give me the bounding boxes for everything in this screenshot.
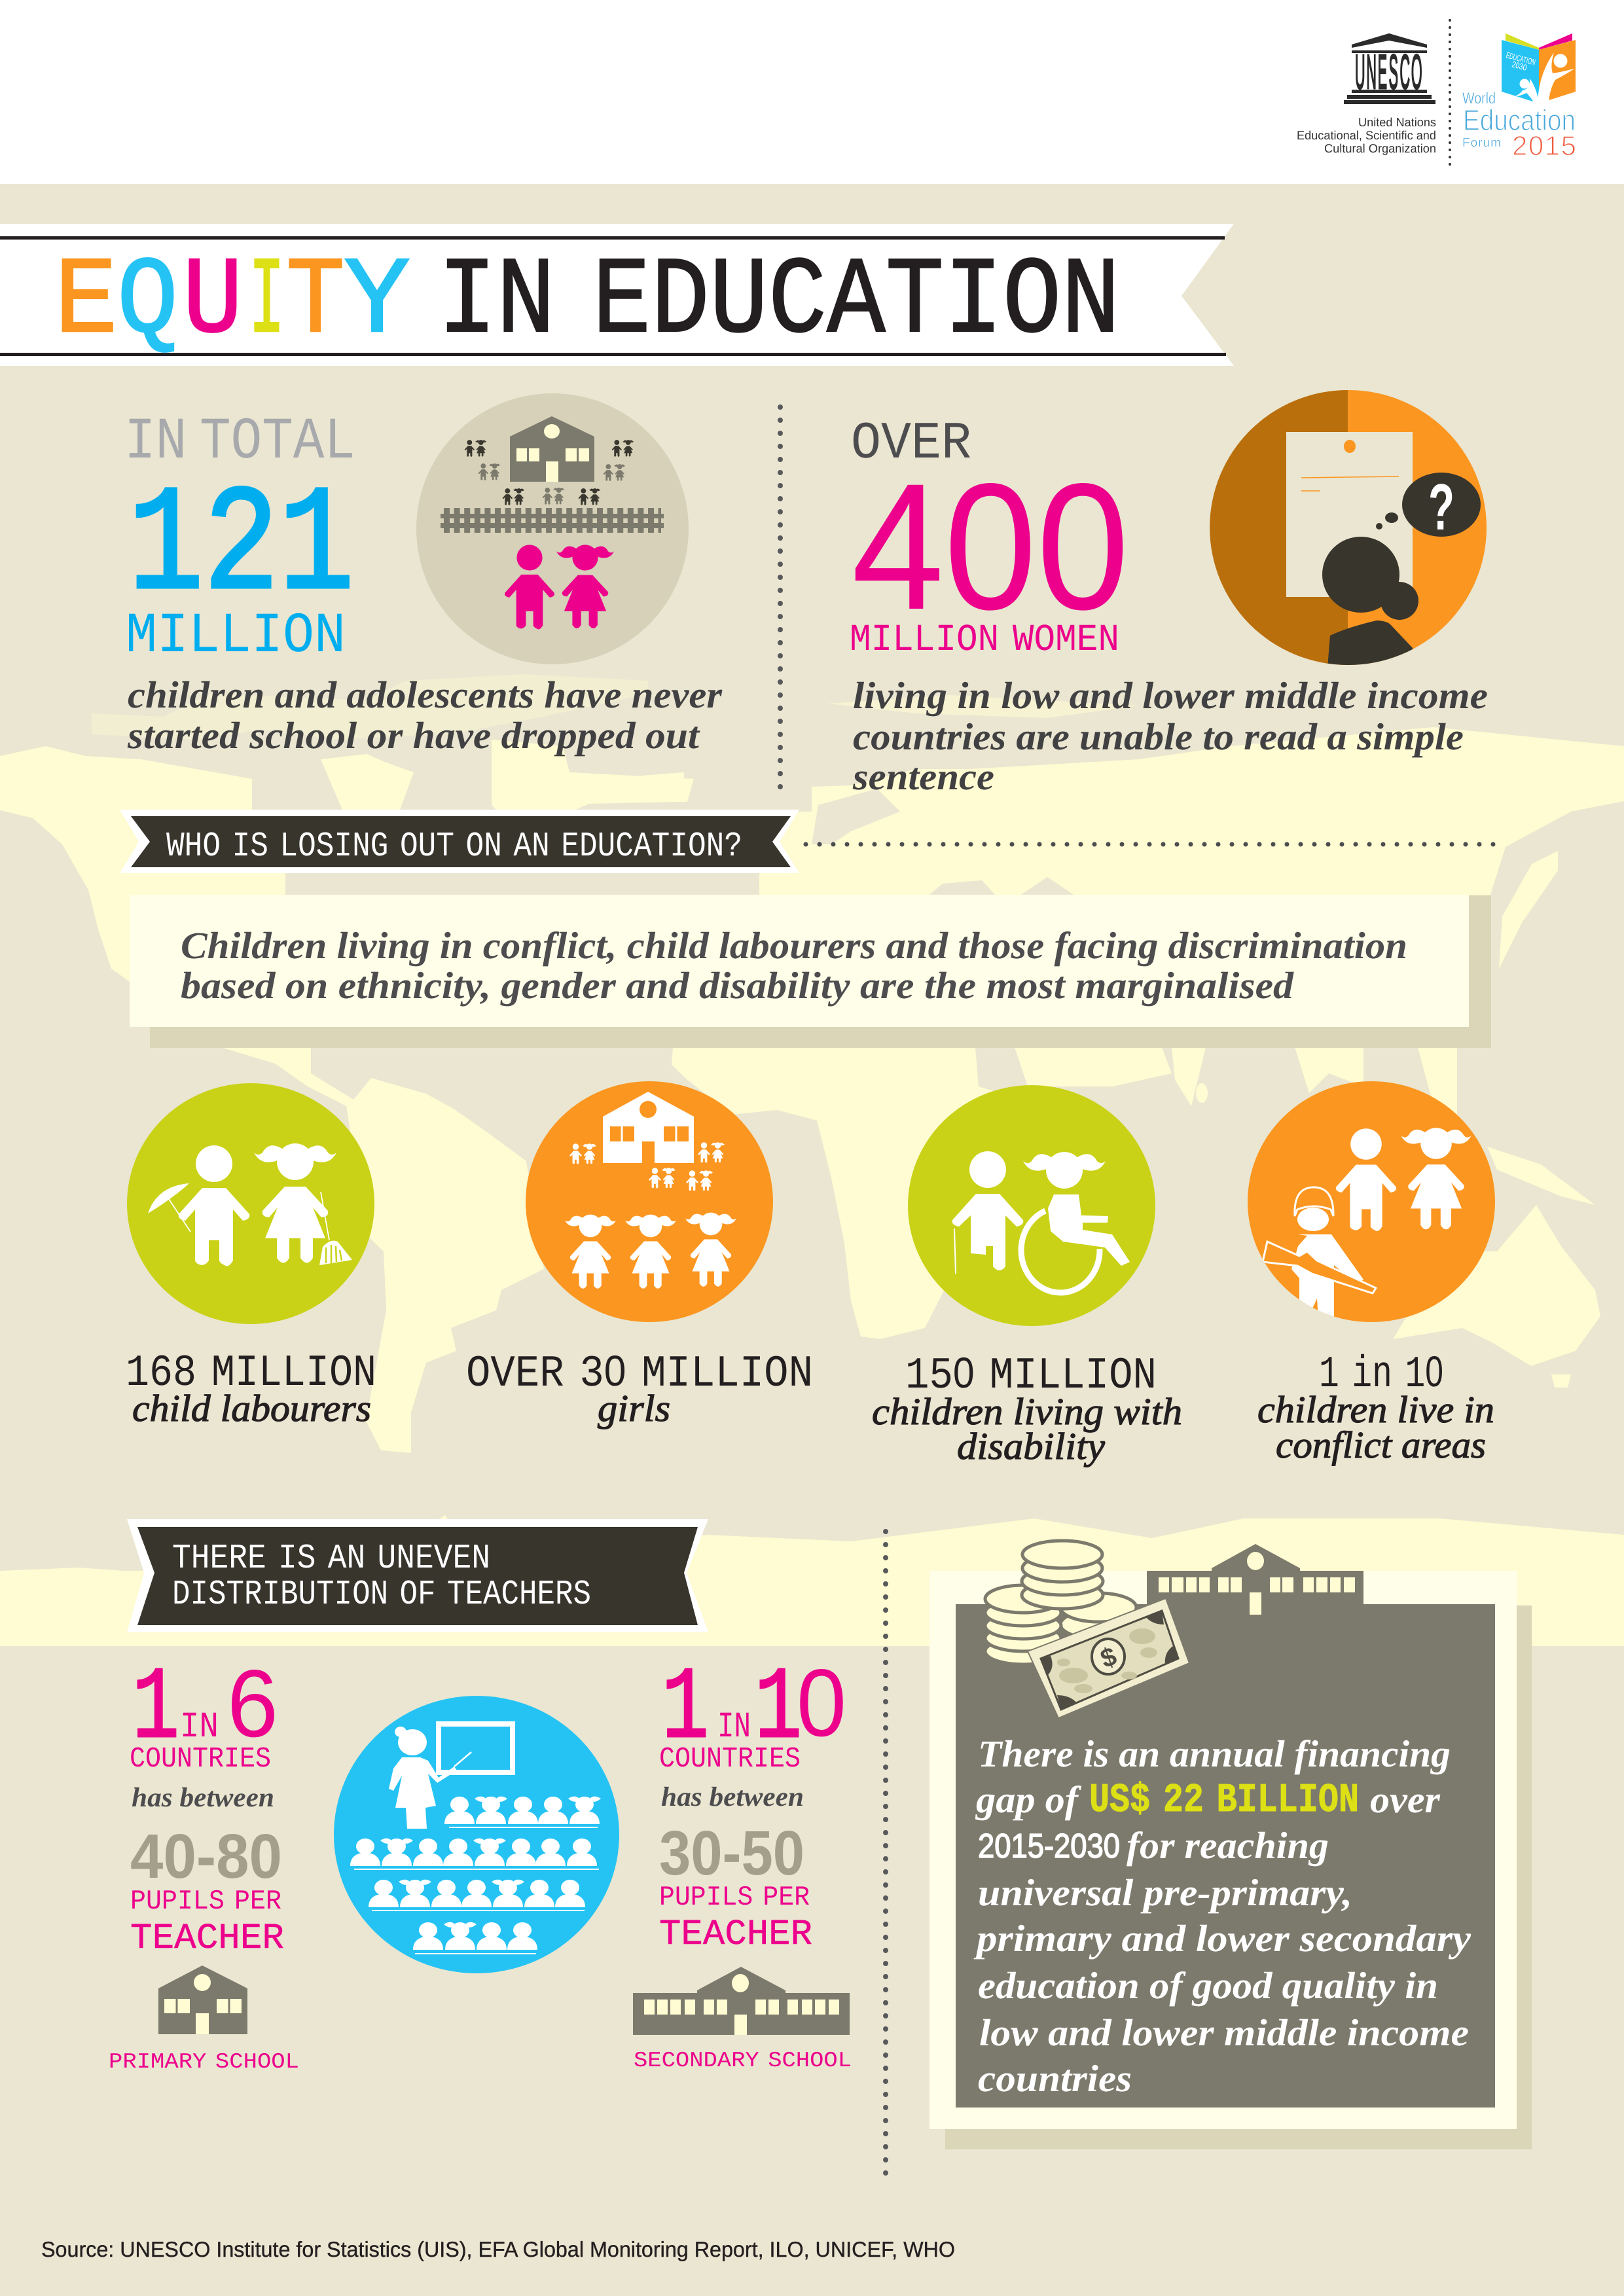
financing text: education of good quality in [978,1964,1438,2007]
description [852,674,1488,798]
banner text: THERE IS AN UNEVEN [172,1539,490,1578]
description: children and adolescents have never [128,673,722,716]
label: over 30 million girls: girls [598,1387,670,1429]
description: started school or have dropped out [127,714,700,757]
label: 150 million children with disability: children living with [872,1390,1182,1433]
title text: I [249,241,285,365]
financing text: universal pre-primary, [978,1871,1352,1914]
description [127,673,722,757]
title text: U [183,241,243,365]
wordmark: World [1462,90,1496,107]
title text: Y [344,241,410,365]
cream frame [929,1571,1517,2129]
financing text: gap of [975,1778,1082,1821]
paper [1286,432,1413,597]
world map background [0,674,1624,1646]
map inland seas [812,789,1074,1080]
title text: E [54,241,118,365]
UNESCO full name: Educational, Scientific and [1297,128,1436,142]
kicker: OVER [851,414,971,474]
number: 400 [852,446,1129,647]
book icon: EDUCATION [1505,50,1537,67]
financing text: 2015-2030 [978,1827,1120,1865]
label: 168 million child labourers: 168 MILLION [126,1348,376,1399]
title text: IN EDUCATION [438,241,1120,365]
icon: woman unable to read [1210,390,1487,668]
icon: secondary school [633,1967,850,2035]
description: sentence [852,755,994,798]
label: 150 million children with disability: 150 MILLION [905,1348,1157,1401]
soldier [1263,1187,1376,1329]
wordmark: Education [1463,103,1576,137]
wordmark: 2015 [1512,130,1576,161]
icon: primary school [158,1965,247,2034]
financing text: low and lower middle income [979,2011,1469,2054]
statistic: primary school ratio [130,1650,284,1959]
label: over 30 million girls: OVER 30 MILLION [466,1346,813,1399]
title text [54,241,1120,365]
fence [441,514,664,528]
boy and girl [505,545,614,630]
label: over 30 million girls [466,1346,813,1429]
icon: children with disability [908,1085,1155,1326]
book icon: 2030 [1511,59,1528,73]
1 in 10: 1 [755,1651,802,1767]
school [510,416,594,482]
label: 168 million child labourers [126,1348,376,1429]
1 in 6: 1 [132,1651,179,1767]
pupils [350,1797,601,1954]
icon: school on panel [1147,1544,1363,1615]
financing text [973,1732,1471,2100]
small children [565,1142,736,1289]
icon: out of school girls [526,1081,773,1322]
description: countries are unable to read a simple [853,715,1464,758]
callout text: Children living in conflict, child labourers and those facing discrimination [181,924,1407,967]
40-80: 40-80 [130,1821,282,1892]
UNESCO full name [1297,115,1436,155]
woman silhouette [1322,537,1418,668]
logo: UNESCO [1297,33,1436,155]
1 in 6: IN [180,1706,219,1748]
sickle [148,1183,189,1213]
financing text: US$ 22 BILLION [1089,1777,1359,1823]
blackboard [439,1724,513,1772]
1 in 10: IN [717,1706,751,1748]
UNESCO full name: United Nations [1358,115,1436,129]
unit: MILLION WOMEN [850,619,1119,662]
source line: Source: UNESCO Institute for Statistics (UIS), EFA Global Monitoring Report, ILO, UNICEF, WHO [41,2237,955,2261]
icon: banknote: $ [1097,1641,1121,1674]
small children [465,440,634,505]
has between: has between [132,1783,274,1813]
banner text: DISTRIBUTION OF TEACHERS [172,1575,591,1614]
pupils per teacher: PUPILS PER [659,1882,810,1913]
three girls [565,1215,616,1289]
statistic: secondary school ratio: TEACHER [659,1914,812,1955]
UNESCO temple [1344,33,1435,104]
1 in 6 [132,1650,278,1767]
countries: COUNTRIES [130,1743,271,1776]
icon: banknote [1028,1598,1189,1718]
UNESCO temple: UNESCO [1355,45,1422,99]
title text: Q [117,241,178,365]
seated figure [1048,1194,1130,1266]
teacher [389,1727,457,1829]
label: 150 million children with disability: disability [957,1425,1105,1467]
description: living in low and lower middle income [853,674,1488,717]
1 in 10 [662,1649,846,1767]
banner text: WHO IS LOSING OUT ON AN EDUCATION? [166,827,742,866]
wordmark: Forum [1462,136,1501,150]
section banner: uneven distribution of teachers [127,1519,708,1632]
label: 150 million children with disability [872,1348,1182,1467]
rifle [1263,1242,1376,1293]
statistic: 400 million women [850,414,1488,798]
kicker: IN TOTAL [124,409,355,476]
countries: COUNTRIES [659,1743,801,1776]
unit: MILLION [126,605,346,669]
financing text: over [1370,1778,1440,1821]
icon: child labourers [127,1083,374,1324]
callout text [181,924,1407,1007]
dark panel [956,1604,1495,2108]
statistic: primary school ratio: TEACHER [130,1918,284,1959]
1 in 6: 6 [227,1650,278,1757]
logo: World Education Forum 2015 [1462,33,1576,161]
UNESCO full name: Cultural Organization [1324,141,1436,155]
has between: has between [661,1782,804,1812]
statistic: secondary school ratio [659,1649,846,1955]
callout: most marginalised [130,895,1491,1048]
icon: coins [985,1541,1136,1664]
label: 1 in 10 children in conflict [1257,1347,1494,1466]
number: 121 [128,463,354,632]
icon: children outside school [416,393,689,664]
ribbon shape [0,224,1234,366]
label: 1 in 10 children in conflict: children live in [1257,1388,1494,1431]
1 in 10: 0 [797,1649,846,1756]
icon: children in conflict areas [1248,1081,1495,1329]
label: 168 million child labourers: child labourers [132,1387,371,1429]
thought bubble [1376,471,1481,544]
financing text: countries [978,2057,1132,2100]
statistic: 121 million [124,409,722,757]
label: secondary school: SECONDARY SCHOOL [634,2049,852,2073]
header white band [0,0,1624,184]
wordmark [1462,90,1576,161]
banner text [172,1539,591,1614]
callout text: based on ethnicity, gender and disability are the most marginalised [181,964,1294,1007]
label: 1 in 10 children in conflict: conflict areas [1276,1424,1486,1466]
book icon [1502,33,1576,103]
rake head [319,1241,352,1265]
title text: T [286,241,345,365]
label: primary school: PRIMARY SCHOOL [109,2050,299,2074]
pupils per teacher: PUPILS PER [130,1886,281,1917]
label: 1 in 10 children in conflict: 1 in 10 [1319,1347,1443,1400]
wheel and cane [1021,1211,1100,1293]
panel: financing gap [929,1541,1532,2149]
1 in 10: 1 [662,1651,709,1767]
icon: teacher and classroom [334,1696,619,1973]
thought bubble: ? [1428,471,1454,544]
financing text: for reaching [1127,1824,1329,1867]
section banner: who is losing out [120,810,799,873]
30-50: 30-50 [659,1818,804,1888]
school [603,1092,694,1163]
title ribbon [0,224,1234,366]
financing text: primary and lower secondary [973,1917,1471,1960]
shadow [945,1605,1532,2149]
financing text: There is an annual financing [978,1732,1451,1775]
